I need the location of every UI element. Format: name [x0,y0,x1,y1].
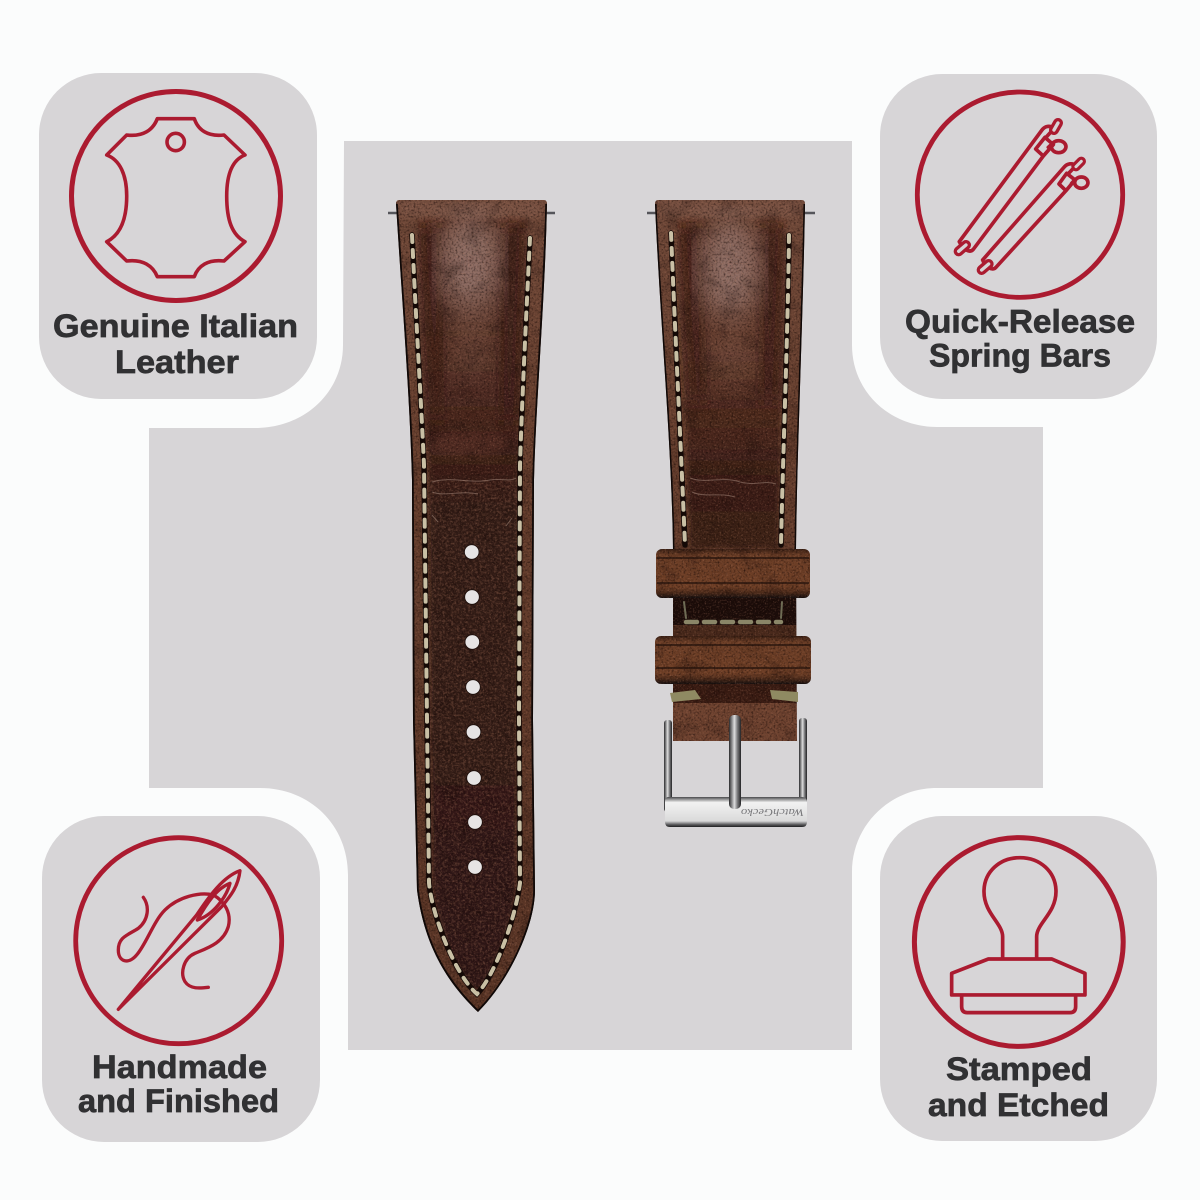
icon: needle and thread [76,838,282,1044]
keeper loops [655,549,811,684]
leather creases [432,478,516,526]
panel: quick-release spring bars [880,74,1157,399]
spring bar pins [647,212,815,214]
icon: stamp [914,838,1123,1046]
card background [880,74,1157,399]
card background [39,73,317,399]
leather creases [690,478,776,497]
buckle strap [647,195,815,827]
label: Handmade [92,1049,267,1085]
label [53,308,298,380]
stitching [412,235,530,994]
label [78,1049,279,1119]
card background [880,816,1157,1141]
buckle frame behind strap [664,718,807,812]
keeper loop stitching [656,558,810,668]
strap holes [464,545,482,874]
label: and Finished [78,1083,279,1119]
strap body [390,195,555,1020]
buckle bar [665,797,807,827]
central grey backdrop [149,141,1043,1050]
label [928,1051,1109,1123]
lower panel grain [430,480,520,1000]
spring bar pins [388,212,555,214]
panel: stamped and etched [880,816,1157,1141]
thread ends [670,690,798,702]
icon: leather hide [72,92,280,300]
panel: handmade and finished [42,816,320,1142]
engraved brand: WatchGecko [740,806,804,818]
label: Genuine Italian [53,308,298,344]
card background [42,816,320,1142]
buckle tongue [729,715,741,809]
icon: spring bars [917,92,1123,297]
label: and Etched [928,1087,1109,1123]
label: Quick-Release [905,304,1135,340]
label: Leather [115,344,239,380]
label: Spring Bars [929,338,1111,374]
stitching [671,233,789,622]
strap body [650,195,810,750]
label: Stamped [946,1051,1092,1087]
panel: genuine italian leather [39,73,317,399]
label [905,304,1135,374]
long leather strap [388,195,555,1020]
